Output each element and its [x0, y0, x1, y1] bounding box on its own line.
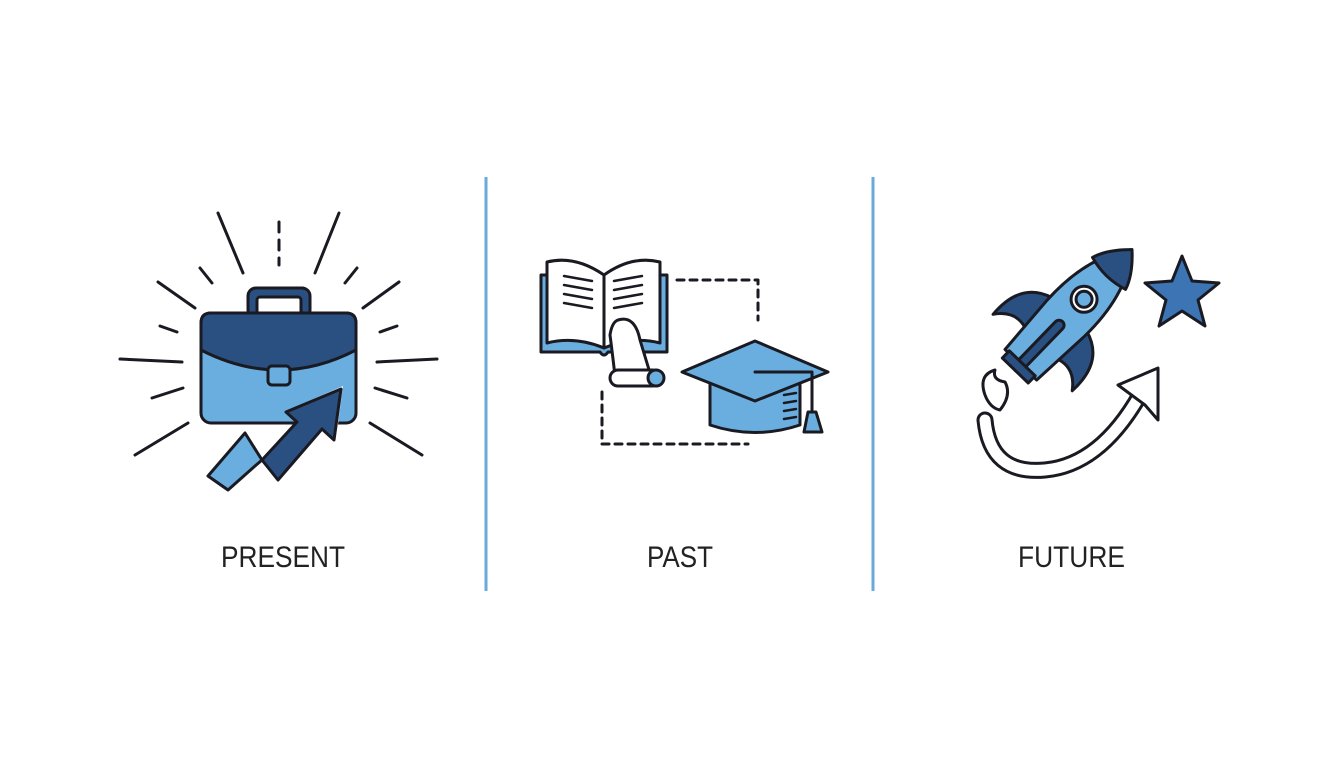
label: future: FUTURE: [1018, 541, 1125, 574]
label: present: PRESENT: [221, 541, 345, 574]
label: past: PAST: [647, 541, 713, 574]
icon: book, scroll and graduation cap: [541, 260, 828, 444]
icon: briefcase with rays and growth arrow: [120, 213, 437, 490]
icon: rocket with star and curved arrow: [976, 211, 1219, 470]
